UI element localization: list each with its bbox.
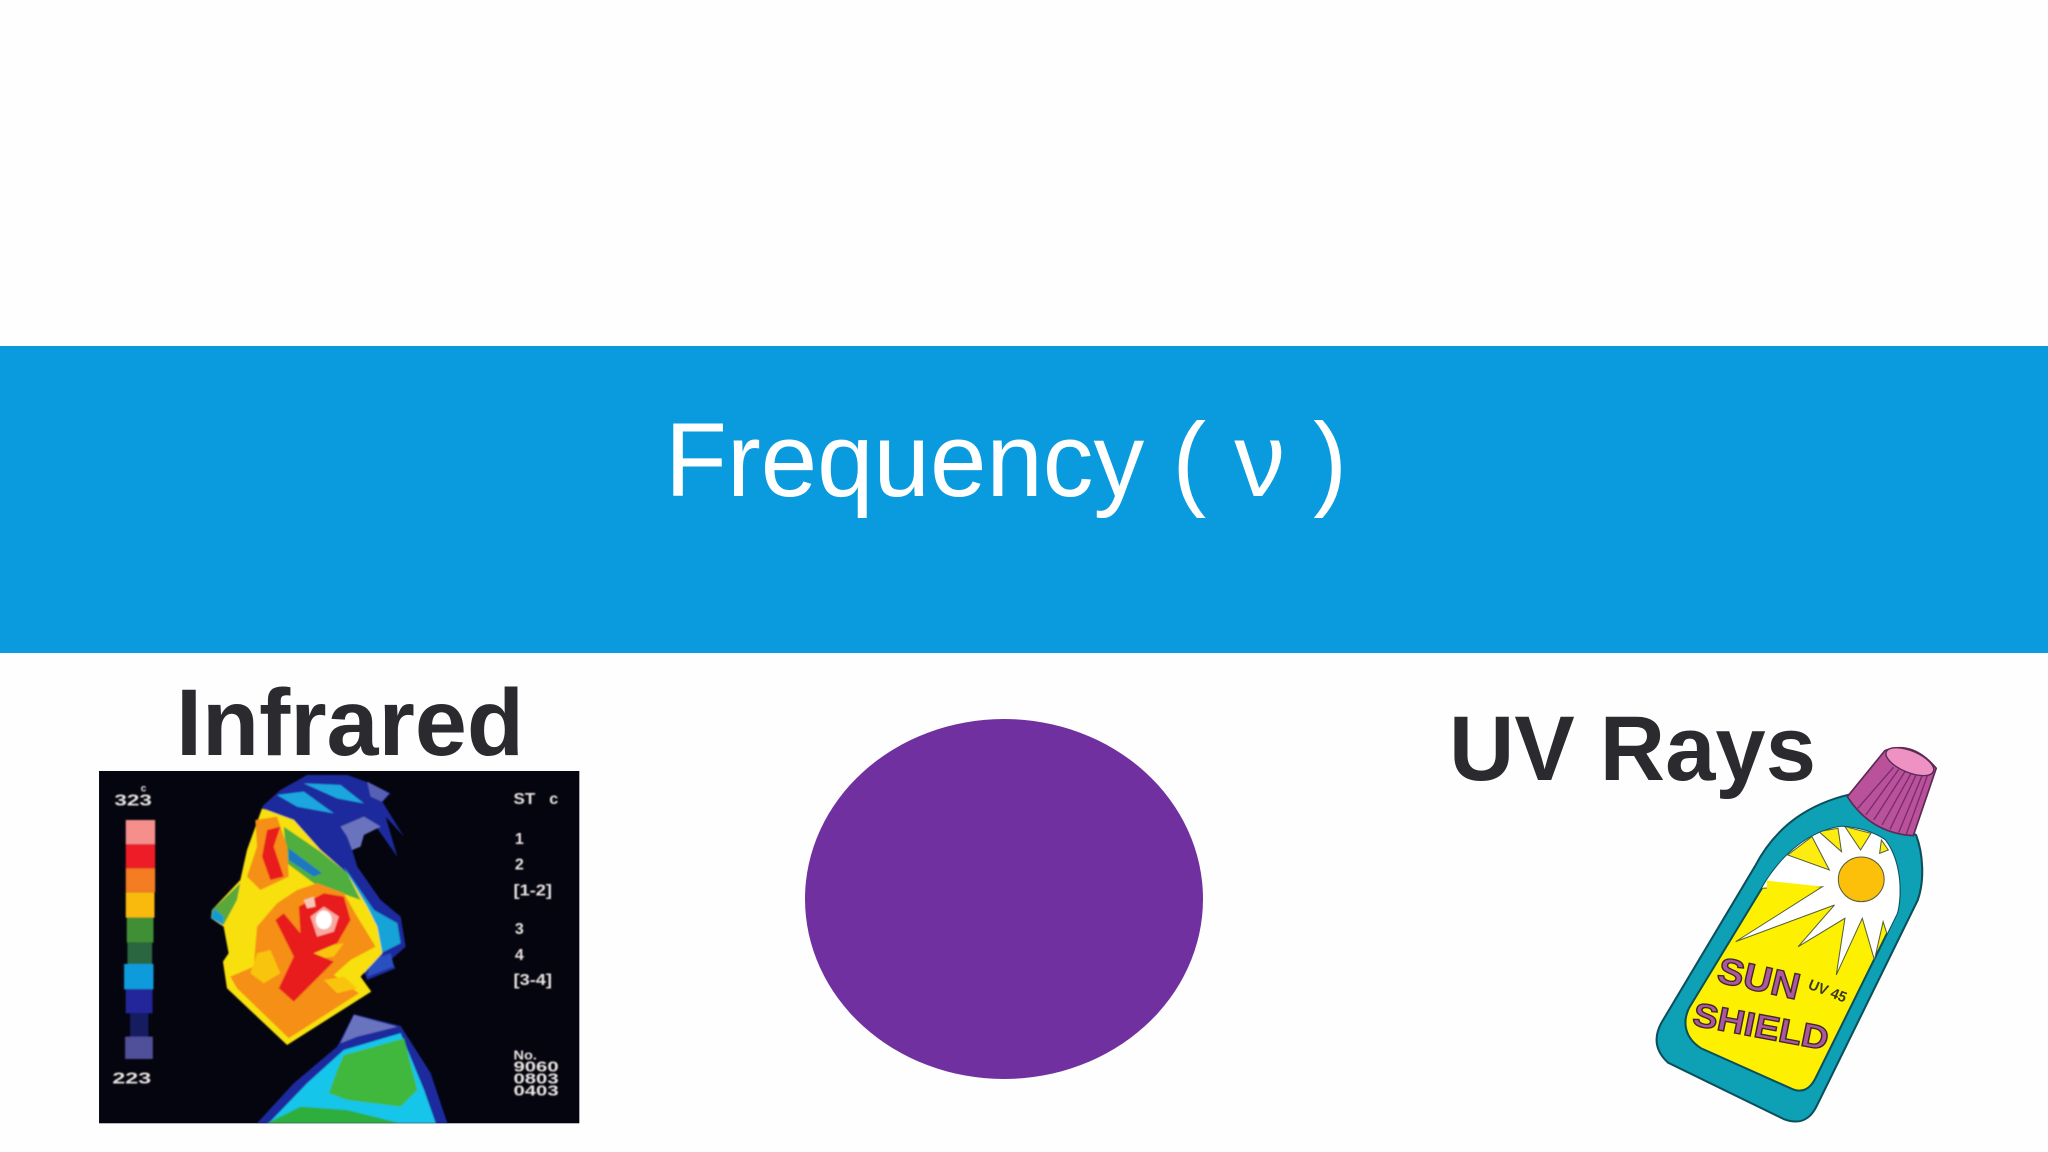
heading: UV Rays: UV Rays (1449, 698, 1816, 800)
hair (262, 775, 406, 980)
hot centre (316, 911, 332, 929)
thermal readouts: ST (514, 791, 535, 808)
thermal readouts: c (549, 791, 558, 808)
bottle body (1657, 794, 1922, 1122)
label text: SUN SHIELD: SUN (1714, 949, 1804, 1007)
thermal readouts: 323 (114, 792, 152, 809)
face: orange areas (230, 817, 376, 1038)
face: outer yellow and green (211, 808, 382, 1045)
title: Frequency ( ν ): Frequency ( ν ) (665, 402, 1347, 519)
thermal readouts: No. (514, 1048, 537, 1062)
thermal readouts (112, 784, 559, 1099)
label text: SUN SHIELD: SHIELD (1690, 996, 1832, 1058)
shoulder (257, 1014, 447, 1123)
thermal readouts: 223 (112, 1070, 151, 1087)
thermal image of a head in profile (99, 771, 579, 1123)
icon: sunscreen bottle (1657, 742, 1938, 1122)
thermal readouts: 9060 (514, 1059, 559, 1075)
title banner (0, 346, 2048, 653)
thermal readouts: 3 (515, 921, 524, 938)
bottle label (1685, 820, 1913, 1091)
label text: SUN SHIELD (1690, 949, 1832, 1058)
label text: UV 45: UV 45 (1806, 976, 1849, 1006)
thermal readouts: c (141, 784, 147, 795)
thermal readouts: 4 (515, 947, 524, 964)
heading: Infrared: Infrared (176, 670, 524, 776)
bottle cap (1847, 742, 1938, 836)
thermal readouts: 1 (515, 831, 524, 848)
thermal readouts: [3-4] (514, 972, 552, 989)
thermal readouts: 0403 (514, 1083, 559, 1099)
face: red hot spots (262, 827, 351, 1002)
sunburst rays (1736, 826, 1900, 976)
thermal readouts: 0803 (514, 1071, 559, 1087)
colour scale bar (124, 820, 155, 1059)
thermal readouts: [1-2] (514, 882, 552, 899)
thermal readouts: 2 (515, 856, 524, 873)
purple circle (805, 719, 1203, 1079)
sun disc (1838, 857, 1884, 902)
